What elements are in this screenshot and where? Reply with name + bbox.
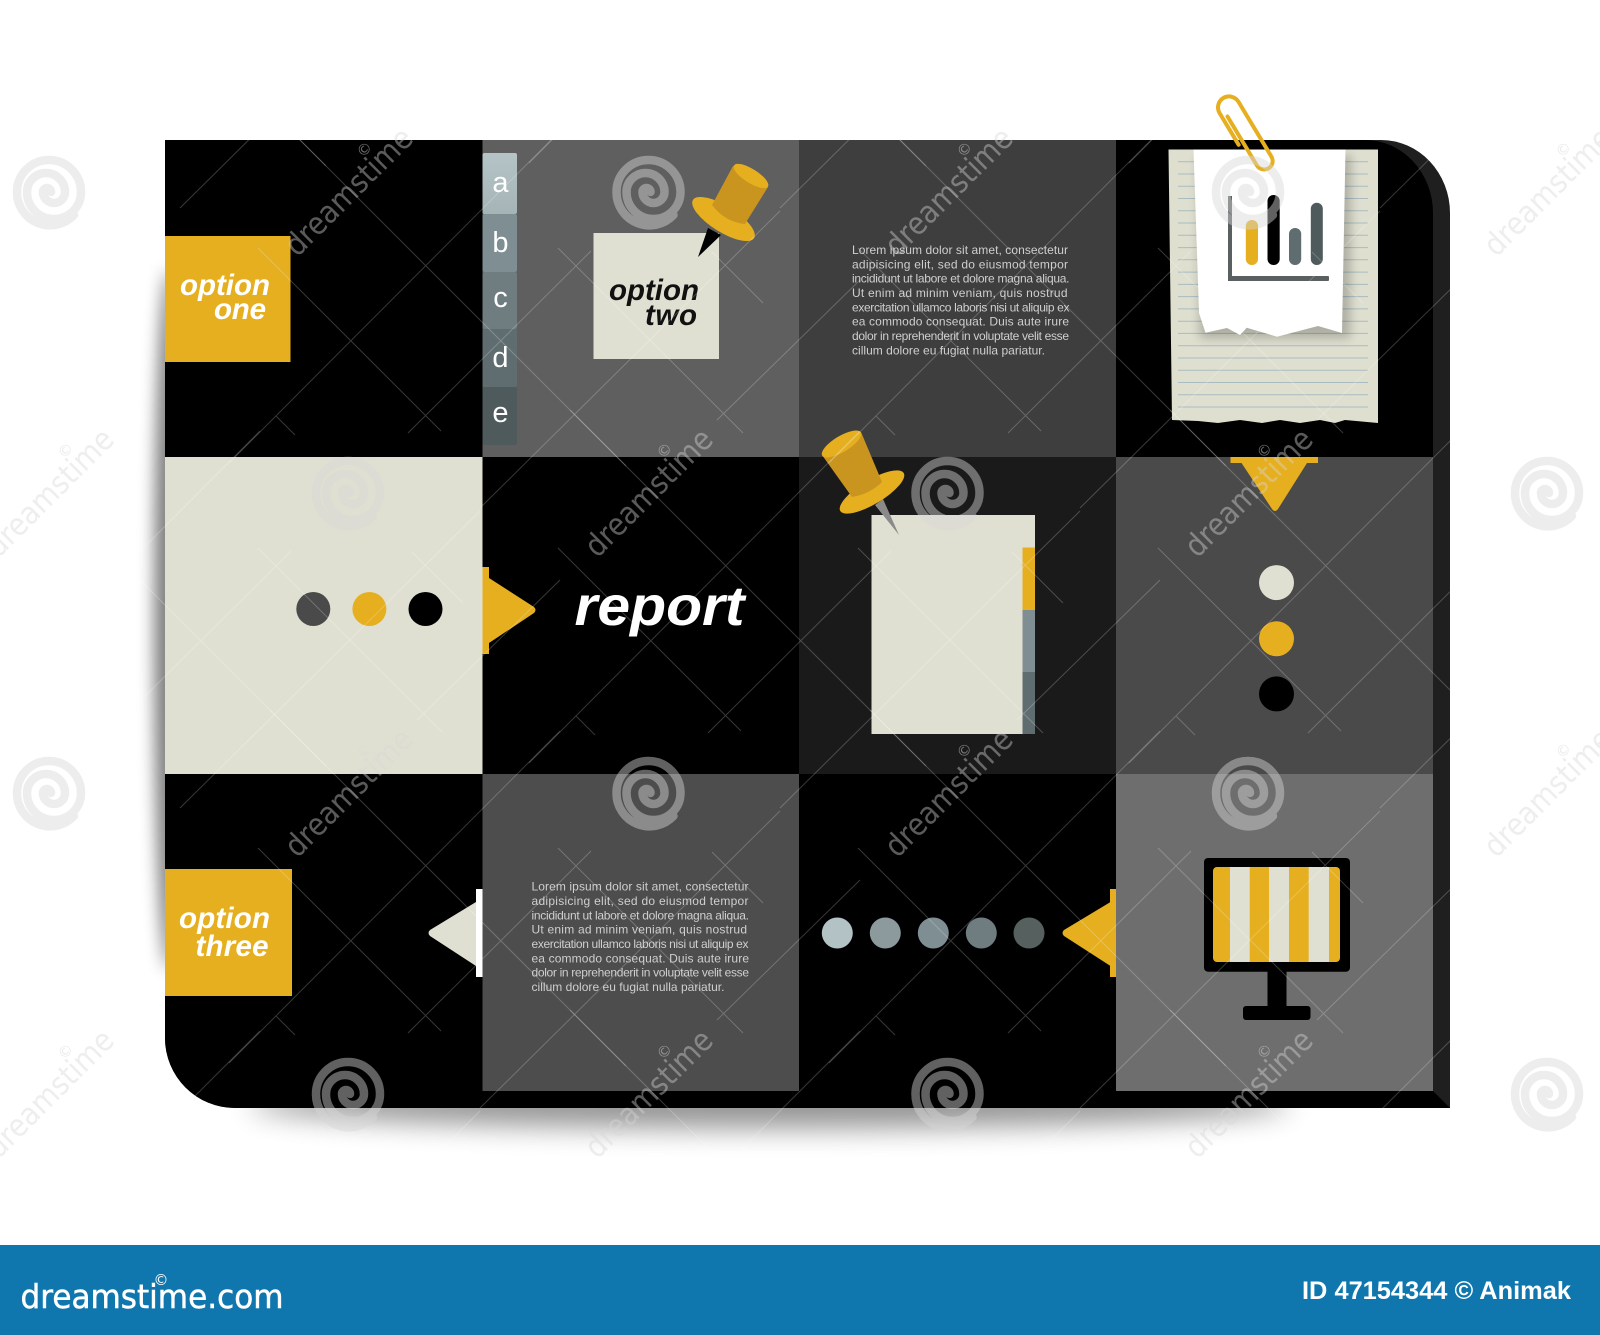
- text block: lorem top: cillum dolore eu fugiat nulla pariatur.: [852, 343, 1045, 357]
- watermark overlay: dreamstime: [578, 1023, 720, 1165]
- text block: lorem top: exercitation ullamco laboris nisi ut aliquip ex: [852, 300, 1070, 314]
- option two note: two: [645, 299, 697, 332]
- text block: lorem top: Ut enim ad minim veniam, quis nostrud: [852, 286, 1068, 300]
- watermark overlay: ©: [54, 439, 77, 462]
- option one label: one: [214, 293, 266, 326]
- watermark overlay: ©: [1552, 739, 1575, 762]
- lined paper with torn edge: [1168, 150, 1378, 423]
- vertical dots: [1259, 565, 1294, 711]
- watermark overlay: ©: [653, 1040, 676, 1063]
- watermark overlay: ©: [653, 439, 676, 462]
- footer bar: ID 47154344 © Animak: [1302, 1277, 1571, 1305]
- watermark overlay: ©: [1253, 1040, 1276, 1063]
- text block: lorem bottom: dolor in reprehenderit in voluptate velit esse: [532, 966, 749, 980]
- tabs a to e: a: [492, 167, 509, 199]
- torn white note with chart: [1194, 150, 1351, 338]
- text block: lorem bottom: exercitation ullamco laboris nisi ut aliquip ex: [532, 937, 748, 951]
- watermark overlay: ©: [353, 739, 376, 762]
- text block: lorem bottom: [532, 880, 749, 994]
- option one label: [165, 236, 290, 362]
- watermark overlay: ©: [1253, 439, 1276, 462]
- option three label: three: [196, 930, 268, 963]
- text block: lorem top: incididunt ut labore et dolore magna aliqua.: [852, 272, 1070, 286]
- row of five grey dots: [822, 918, 1044, 948]
- panel: tile grid: [165, 140, 1433, 1091]
- tabs a to e: [482, 153, 517, 445]
- icon: left cream arrow: [428, 889, 482, 977]
- icon: paperclip: [1214, 92, 1276, 175]
- tabs a to e: e: [492, 397, 509, 429]
- footer bar: dreamstime.com: [20, 1277, 284, 1316]
- option three label: option: [179, 902, 270, 935]
- watermark overlay: dreamstime: [1178, 422, 1320, 564]
- option three label: [165, 869, 292, 996]
- icon: push pin top: [686, 159, 772, 257]
- footer bar: [0, 1245, 1600, 1335]
- panel shadows: [154, 270, 1290, 1128]
- text block: lorem top: dolor in reprehenderit in voluptate velit esse: [852, 329, 1069, 343]
- option two note: [594, 233, 719, 359]
- panel: rounded board: [165, 140, 1450, 1108]
- watermark overlay: ©: [54, 1040, 77, 1063]
- tabbed document note: [872, 515, 1035, 734]
- text block: lorem bottom: Lorem ipsum dolor sit amet, consectetur: [532, 880, 748, 894]
- tabs a to e: b: [492, 227, 509, 259]
- option two note: option: [609, 274, 699, 307]
- watermark overlay: ©: [953, 138, 976, 161]
- icon: monitor: [1204, 858, 1350, 1020]
- watermark overlay: dreamstime: [278, 121, 420, 263]
- horizontal dots on cream tile: [296, 592, 442, 626]
- tabs a to e: d: [492, 342, 509, 374]
- text block: lorem bottom: adipisicing elit, sed do eiusmod tempor: [532, 894, 748, 908]
- text block: lorem bottom: Ut enim ad minim veniam, quis nostrud: [532, 923, 747, 937]
- text block: lorem top: ea commodo consequat. Duis aute irure: [852, 315, 1069, 329]
- text block: lorem top: [852, 243, 1070, 357]
- watermark overlay: dreamstime: [1178, 1023, 1320, 1165]
- option one label: option: [180, 269, 270, 302]
- text block: lorem bottom: incididunt ut labore et dolore magna aliqua.: [532, 908, 749, 922]
- icon: left yellow arrow: [1062, 889, 1116, 977]
- text block: lorem top: Lorem ipsum dolor sit amet, consectetur: [852, 243, 1068, 257]
- icon: push pin middle: [818, 426, 910, 535]
- watermark overlay: ©: [353, 138, 376, 161]
- watermark overlay: ©: [953, 739, 976, 762]
- text block: lorem bottom: cillum dolore eu fugiat nulla pariatur.: [532, 980, 724, 994]
- watermark overlay: dreamstime: [878, 121, 1020, 263]
- watermark overlay: dreamstime: [578, 422, 720, 564]
- watermark overlay: dreamstime: [278, 722, 420, 864]
- footer bar: ©: [154, 1271, 168, 1289]
- report heading: report: [574, 574, 747, 637]
- watermark overlay: ©: [1552, 138, 1575, 161]
- icon: right arrow: [482, 567, 536, 654]
- text block: lorem top: adipisicing elit, sed do eiusmod tempor: [852, 257, 1068, 271]
- tabs a to e: c: [493, 282, 508, 314]
- watermark overlay: dreamstime: [878, 722, 1020, 864]
- text block: lorem bottom: ea commodo consequat. Duis aute irure: [532, 951, 749, 965]
- icon: down arrow: [1230, 457, 1318, 511]
